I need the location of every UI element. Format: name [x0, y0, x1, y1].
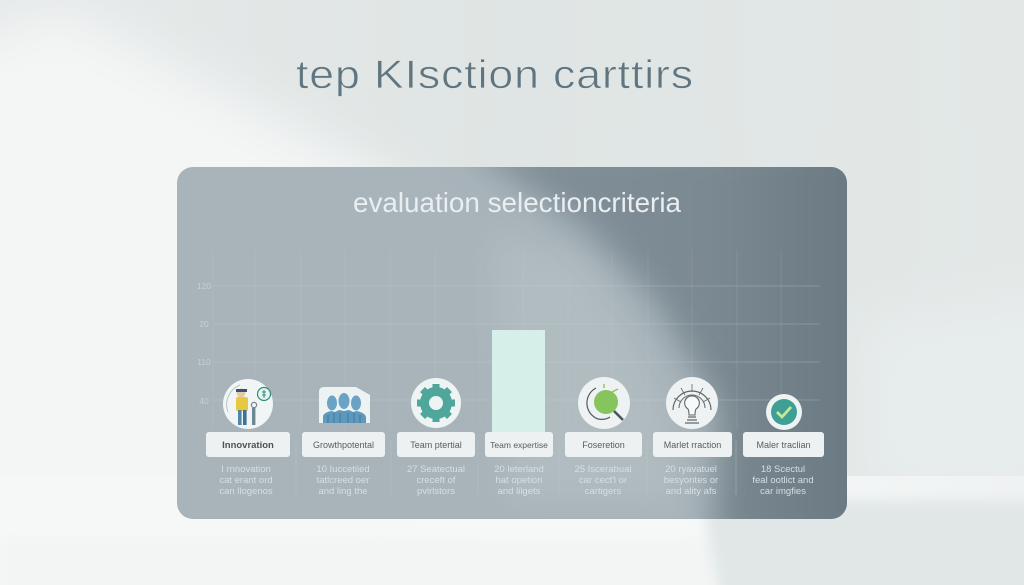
y axis labels: 110	[197, 357, 211, 367]
label: Innovation	[206, 432, 290, 457]
title: tep KIsction carttirs	[296, 53, 694, 97]
label: Maker traction	[743, 432, 824, 457]
description: column 5: cartigers	[585, 486, 621, 497]
label: Foseretion: Foseretion	[582, 440, 625, 450]
description: column 1: I rnnovation	[221, 464, 271, 475]
label: Growth potential: Growthpotental	[313, 440, 374, 450]
label: Team expertise: Team expertise	[490, 440, 548, 450]
label: Team expertise	[485, 432, 553, 457]
description: column 7: 18 Scectul	[761, 464, 805, 475]
label: Growth potential	[302, 432, 385, 457]
panel heading: evaluation selectioncriteria	[353, 187, 682, 218]
y axis labels	[197, 281, 211, 406]
description: column 4: and lilgets	[498, 486, 541, 497]
bar	[492, 330, 545, 433]
icon: light bulb	[666, 377, 718, 429]
label: Market raction	[653, 432, 732, 457]
description: column 5: 25 Iscerabual	[574, 464, 632, 475]
label: Maker traction: Maler traclian	[756, 440, 811, 450]
label: Team potential	[397, 432, 475, 457]
description: column 4: hat opetion	[495, 475, 543, 486]
label: Team potential: Team ptertial	[410, 440, 462, 450]
y axis labels: 120	[197, 281, 211, 291]
icon: check badge	[766, 394, 802, 430]
floor	[0, 476, 1024, 585]
description: column 2: tatlcreed oer	[317, 475, 369, 486]
icon: magnifier	[578, 377, 630, 429]
panel: evaluation criteria	[177, 167, 847, 519]
chart grid	[213, 250, 820, 430]
y axis labels: 40	[199, 396, 209, 406]
column separators	[296, 440, 736, 495]
description: column 6: besyontes or	[664, 475, 718, 486]
description: column 7: feal ootlict and	[752, 475, 814, 486]
y axis labels: 20	[199, 319, 209, 329]
description: column 3: creceft of	[416, 475, 456, 486]
description: column 7: car imgfies	[760, 486, 806, 497]
description: column 2: 10 Iuccetiled	[316, 464, 370, 475]
description: column 6: and ality afs	[666, 486, 717, 497]
description: column 1: can llogenos	[219, 486, 273, 497]
description: column 6: 20 ryavatuel	[665, 464, 717, 475]
description: column 3: 27 Seatectual	[407, 464, 465, 475]
label: Market raction: Marlet rraction	[664, 440, 721, 450]
description: column 2: and ling the	[318, 486, 368, 497]
description text blocks	[219, 464, 814, 497]
description: column 5: car cect'l or	[579, 475, 627, 486]
description: column 3: pvlrlstors	[417, 486, 455, 497]
icon: worker with coin	[223, 379, 273, 429]
icon: team group	[319, 387, 370, 423]
icon: gear	[411, 378, 461, 428]
description: column 1: cat erant ord	[219, 475, 273, 486]
label: Innovation: Innovration	[222, 440, 274, 451]
label: Foseretion	[565, 432, 642, 457]
description: column 4: 20 leterland	[494, 464, 544, 475]
